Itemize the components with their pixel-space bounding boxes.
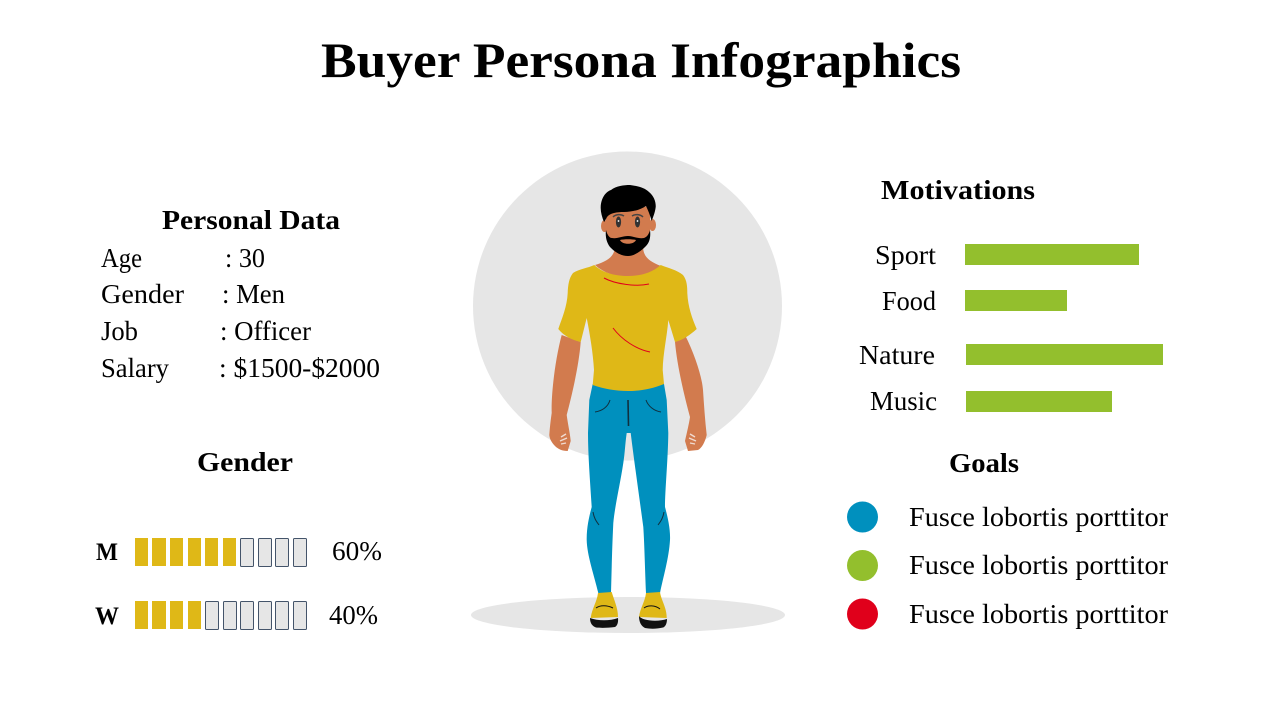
backdrop circle: [473, 152, 782, 460]
jeans creases: [593, 400, 664, 525]
ground shadow: [471, 597, 785, 633]
row: gender: : Men: [222, 279, 285, 309]
row: women 40%: 40%: [329, 600, 378, 630]
bar: music: Music: [870, 386, 937, 416]
shirt: [558, 265, 697, 391]
heading: motivations: Motivations: [881, 175, 1035, 205]
heading: gender: Gender: [197, 447, 293, 477]
shirt creases: [604, 278, 650, 352]
goal item: green: Fusce lobortis porttitor: [909, 550, 1168, 580]
goal item: blue: Fusce lobortis porttitor: [909, 502, 1168, 532]
persona figure: [549, 185, 707, 629]
row: age: Age: [101, 243, 142, 273]
row: job: [101, 316, 311, 346]
row: women 40%: [95, 600, 378, 630]
arms: [549, 335, 707, 451]
row: men 60%: M: [96, 539, 118, 566]
heading: personal data: Personal Data: [162, 205, 341, 235]
row: job: : Officer: [220, 316, 311, 346]
bar: sport: [875, 240, 1139, 270]
row: salary: [101, 353, 380, 383]
row: men 60%: [96, 536, 382, 566]
bar: food: Food: [882, 286, 936, 316]
goal item: red: Fusce lobortis porttitor: [909, 599, 1168, 629]
panel: motivations: [859, 175, 1163, 416]
shoes: [590, 592, 667, 629]
eyes and brows: [613, 215, 643, 228]
panel: gender: [95, 447, 382, 630]
bar: nature: Nature: [859, 340, 935, 370]
bar: music: [870, 386, 1112, 416]
bar: sport: Sport: [875, 240, 937, 270]
row: salary: : $1500-$2000: [219, 353, 380, 383]
row: men 60%: 60%: [332, 536, 382, 566]
face: [606, 206, 650, 254]
row: salary: Salary: [101, 353, 169, 383]
row: gender: Gender: [101, 279, 184, 309]
bar: food: [882, 286, 1067, 316]
beard: [606, 230, 650, 256]
title: Buyer Persona Infographics: [321, 32, 961, 88]
mouth: [620, 239, 636, 244]
panel: goals: [847, 448, 1168, 630]
row: gender: [101, 279, 285, 309]
hand details: [560, 434, 696, 444]
row: age: [101, 243, 265, 273]
jeans: [587, 384, 670, 593]
row: job: Job: [101, 316, 138, 346]
neck: [595, 246, 661, 277]
heading: goals: Goals: [949, 448, 1019, 478]
row: age: : 30: [225, 243, 265, 273]
hair: [601, 185, 656, 222]
ears: [601, 219, 656, 232]
panel: personal data: [101, 205, 380, 383]
row: women 40%: W: [95, 603, 119, 630]
bar: nature: [859, 340, 1163, 370]
